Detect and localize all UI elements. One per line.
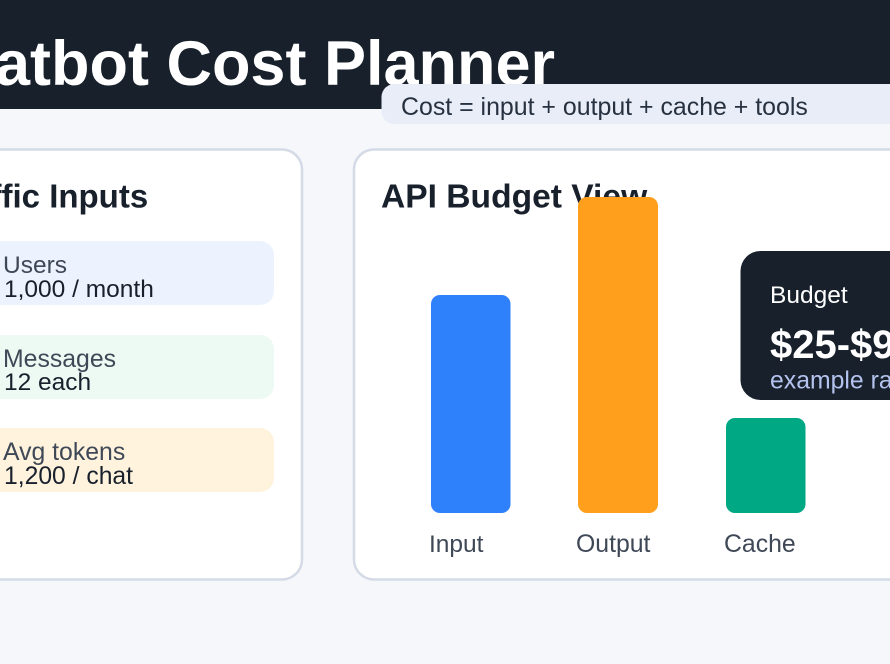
input row: avg tokens: 1,200 / chat [4, 463, 133, 490]
formula pill [382, 84, 890, 124]
label: output: Output [576, 531, 651, 558]
callout: budget [740, 251, 890, 400]
callout: budget: Budget [770, 282, 848, 309]
input row: avg tokens: Avg tokens [3, 439, 125, 466]
input row: messages: 12 each [4, 369, 91, 396]
heading: api budget view: API Budget View [381, 178, 648, 216]
formula pill: Cost = input + output + cache + tools [401, 93, 808, 121]
bar: input [431, 295, 510, 513]
input row: avg tokens [0, 428, 274, 492]
label: cache: Cache [724, 531, 796, 558]
input row: messages [0, 335, 274, 399]
input row: users: Users [3, 252, 67, 279]
input row: messages: Messages [3, 346, 116, 373]
bar: output [578, 197, 658, 513]
bar: cache [726, 418, 806, 513]
input row: users [0, 241, 274, 305]
header band [0, 0, 890, 109]
bar chart [429, 197, 806, 558]
label: input: Input [429, 531, 484, 558]
panel: api budget view [354, 150, 890, 580]
panel: traffic inputs [0, 150, 302, 580]
input row: users: 1,000 / month [4, 276, 154, 303]
